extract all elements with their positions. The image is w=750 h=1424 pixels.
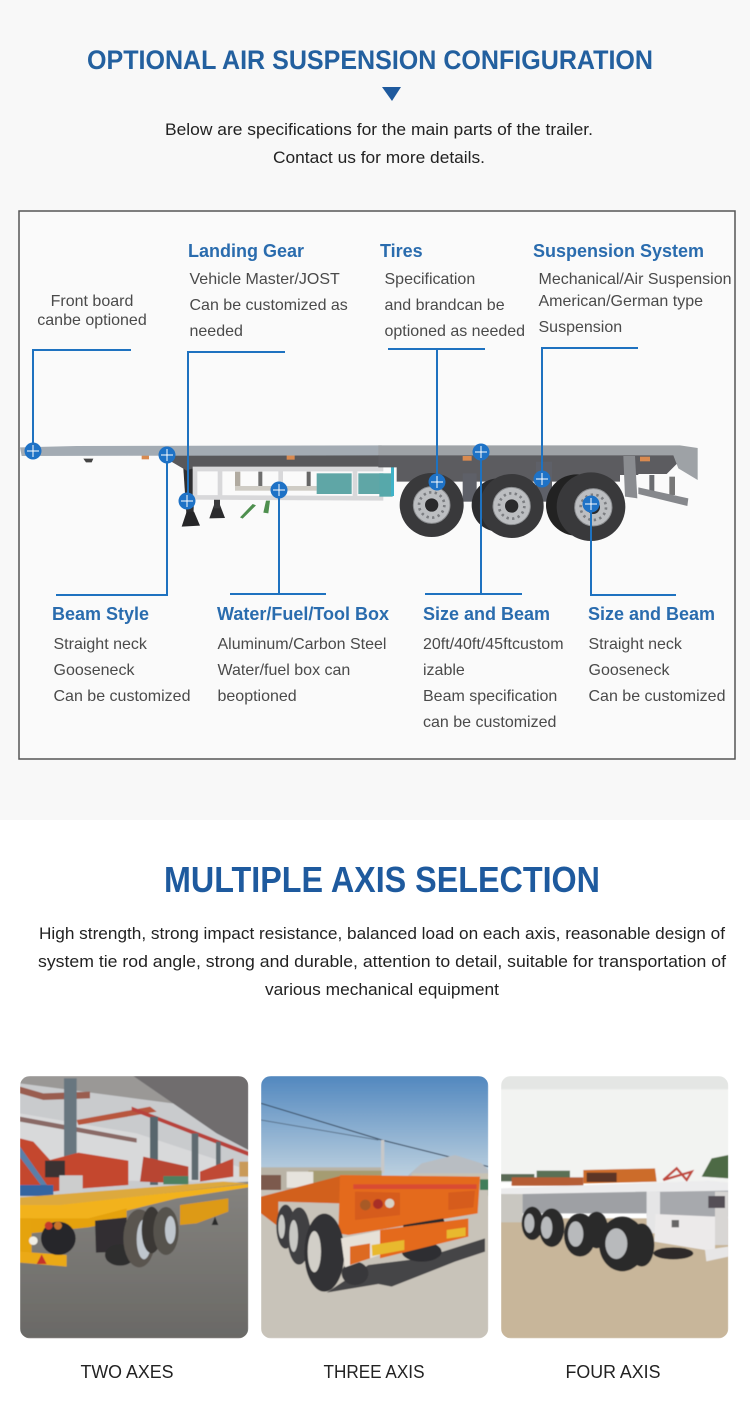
- callout: tires: Tires: [380, 241, 423, 261]
- description text: [38, 924, 726, 999]
- panel: trailer specifications: [19, 211, 735, 759]
- callout: landing gear: needed: [190, 323, 243, 340]
- callout: suspension system: Mechanical/Air Suspension: [538, 271, 732, 288]
- callout: front board: canbe optioned: [37, 312, 147, 329]
- description text: system tie rod angle, strong and durable, attention to detail, suitable for transportation of: [38, 952, 726, 971]
- callout: size and beam left: can be customized: [423, 714, 556, 731]
- callout: size and beam right: Gooseneck: [588, 662, 670, 679]
- callout: beam style: Beam Style: [52, 604, 149, 624]
- callout: tires: Specification: [384, 271, 475, 288]
- title: multiple axis selection: MULTIPLE AXIS SELECTION: [164, 859, 600, 900]
- description text: various mechanical equipment: [265, 980, 499, 999]
- callout: suspension system: Suspension: [538, 319, 622, 336]
- callout: water fuel tool box: Aluminum/Carbon Steel: [218, 636, 386, 653]
- description text: High strength, strong impact resistance, balanced load on each axis, reasonable design of: [39, 924, 725, 943]
- callout: size and beam right: [582, 496, 725, 705]
- callout: size and beam left: Beam specification: [423, 688, 557, 705]
- callout: landing gear: Vehicle Master/JOST: [190, 271, 340, 288]
- callout: size and beam left: izable: [423, 662, 465, 679]
- callout: beam style: [52, 446, 190, 705]
- callout: size and beam left: 20ft/40ft/45ftcustom: [423, 636, 564, 653]
- caption: four axis: FOUR AXIS: [566, 1362, 660, 1382]
- callout: suspension system: American/German type: [538, 293, 703, 310]
- photo: three axis orange trailer: [261, 1076, 488, 1338]
- icon: down triangle: [382, 87, 401, 101]
- callout: water fuel tool box: Water/Fuel/Tool Box: [217, 604, 389, 624]
- photo: two axes yellow trailer: [20, 1076, 248, 1338]
- callout: beam style: Gooseneck: [54, 662, 135, 679]
- caption: two axes: TWO AXES: [80, 1362, 174, 1382]
- callout: beam style: Straight neck: [54, 636, 148, 653]
- callout: tires: optioned as needed: [384, 323, 525, 340]
- illustration: flatbed trailer: [20, 445, 698, 541]
- callout: front board: [24, 293, 147, 460]
- intro text: [165, 120, 593, 167]
- callout: front board: Front board: [51, 293, 133, 310]
- callout: water fuel tool box: beoptioned: [218, 688, 297, 705]
- callout: landing gear: Can be customized as: [190, 297, 348, 314]
- caption: three axis: THREE AXIS: [324, 1362, 424, 1382]
- callout: water fuel tool box: Water/fuel box can: [218, 662, 350, 679]
- callout: size and beam left: [423, 444, 564, 731]
- callout: tires: and brandcan be: [384, 297, 505, 314]
- callout: landing gear: [178, 241, 348, 510]
- callout: water fuel tool box: [217, 482, 389, 705]
- callout: beam style: Can be customized: [54, 688, 190, 705]
- callout: landing gear: Landing Gear: [188, 241, 304, 261]
- photo: four axis white trailer: [501, 1076, 728, 1338]
- callout: size and beam right: Size and Beam: [588, 604, 715, 624]
- callout: suspension system: [533, 241, 732, 488]
- callout: size and beam left: Size and Beam: [423, 604, 550, 624]
- callout: tires: [380, 241, 525, 490]
- title: optional air suspension: OPTIONAL AIR SUSPENSION CONFIGURATION: [87, 45, 653, 75]
- callout: size and beam right: Can be customized: [588, 688, 725, 705]
- intro text: Below are specifications for the main parts of the trailer.: [165, 120, 593, 139]
- upper section background: [0, 0, 750, 820]
- intro text: Contact us for more details.: [273, 148, 485, 167]
- callout: size and beam right: Straight neck: [588, 636, 683, 653]
- callout: suspension system: Suspension System: [533, 241, 704, 261]
